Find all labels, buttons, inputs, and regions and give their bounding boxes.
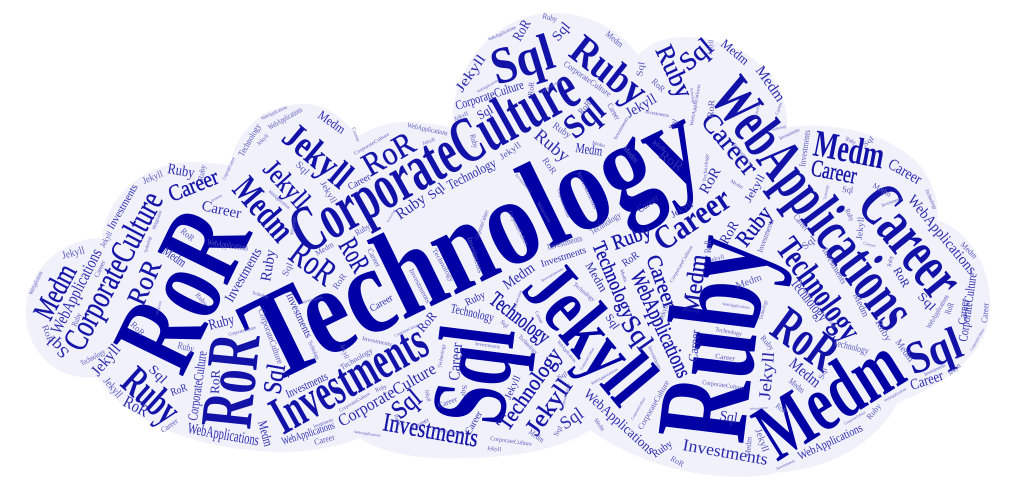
- tiny words: Sql: [861, 135, 876, 149]
- tiny words: Ruby: [844, 136, 857, 146]
- tiny words: Medm: [787, 376, 807, 395]
- tiny words: Investments: [465, 236, 485, 274]
- tiny words: WebApplications: [535, 202, 551, 224]
- tiny words: WebApplications: [476, 77, 500, 94]
- tiny words: Investments: [881, 197, 903, 209]
- small words: Medm: [255, 419, 276, 448]
- tiny words: Jekyll: [651, 140, 666, 153]
- tiny words: CorporateCulture: [256, 307, 285, 365]
- tiny words: Ruby: [541, 11, 558, 24]
- tiny words: Ruby: [468, 133, 480, 149]
- tiny words: Medm: [604, 29, 625, 49]
- tiny words: CorporateCulture: [511, 290, 523, 310]
- medium regular words: Sql: [385, 383, 427, 425]
- tiny words: WebApplications: [28, 270, 45, 296]
- tiny words: Technology: [438, 343, 447, 368]
- tiny words: Investments: [755, 218, 776, 254]
- tiny words: CorporateCulture: [393, 322, 420, 338]
- small words: WebApplications: [186, 420, 260, 449]
- tiny words: Technology: [588, 209, 623, 237]
- tiny words: CorporateCulture: [228, 326, 257, 338]
- medium bold words: Technology: [769, 230, 870, 348]
- tiny words: Jekyll: [706, 39, 715, 55]
- tiny words: WebApplications: [407, 121, 449, 138]
- tiny words: Sql: [293, 159, 311, 178]
- tiny words: WebApplications: [750, 405, 769, 411]
- small words: Sql: [43, 332, 73, 361]
- medium bold words: [112, 24, 969, 434]
- tiny words: Career: [715, 352, 736, 363]
- tiny words: Technology: [306, 340, 320, 361]
- tiny words: Medm: [618, 269, 627, 283]
- tiny words: WebApplications: [154, 300, 163, 315]
- small words: Career: [955, 298, 971, 325]
- tiny words: WebApplications: [731, 143, 753, 168]
- tiny words: Investments: [313, 418, 334, 430]
- small words: CorporateCulture: [186, 350, 211, 422]
- word: Ruby large: Ruby: [629, 228, 797, 449]
- tiny words: WebApplications: [261, 105, 288, 122]
- tiny words: Technology: [517, 334, 539, 356]
- small words: CorporateCulture: [334, 359, 439, 430]
- tiny words: Career: [93, 259, 108, 279]
- medium regular words: Sql: [673, 32, 719, 77]
- tiny words: Sql: [280, 260, 295, 278]
- tiny words: Technology: [144, 235, 153, 254]
- tiny words: Investments: [546, 233, 584, 252]
- small words: Investments: [681, 435, 769, 469]
- tiny words: Investments: [924, 364, 947, 378]
- tiny words: Sql: [634, 60, 647, 77]
- tiny words: Investments: [362, 336, 393, 348]
- small words: WebApplications: [280, 419, 336, 448]
- tiny words: Investments: [475, 342, 500, 350]
- tiny words: Ruby: [196, 164, 208, 181]
- tiny words: Medm: [893, 337, 916, 364]
- tiny words: Career: [775, 101, 784, 116]
- tiny words: CorporateCulture: [562, 58, 614, 99]
- tiny words: Technology: [79, 347, 107, 368]
- medium regular words: Medm: [678, 252, 712, 316]
- tiny words: Jekyll: [947, 363, 963, 378]
- medium regular words: Career: [641, 252, 683, 311]
- small words: Sql: [550, 20, 574, 45]
- tiny words: Jekyll: [657, 304, 670, 321]
- small words: WebApplications: [904, 192, 979, 278]
- small words: Ruby: [463, 289, 488, 309]
- tiny words: Jekyll: [256, 133, 271, 147]
- small words: Investments: [283, 291, 314, 340]
- tiny words: CorporateCulture: [474, 209, 491, 241]
- small words: Career: [446, 341, 466, 381]
- tiny words: RoR: [576, 98, 593, 116]
- tiny words: CorporateCulture: [338, 392, 372, 414]
- small words: Jekyll: [669, 199, 695, 221]
- tiny words: Career: [791, 212, 811, 233]
- tiny words: Jekyll: [318, 179, 339, 205]
- small words: Technology: [449, 300, 496, 325]
- small words: Jekyll: [742, 173, 768, 204]
- tiny words: CorporateCulture: [559, 383, 571, 410]
- tiny words: Technology: [689, 87, 697, 104]
- medium bold words: Career: [647, 180, 738, 259]
- medium regular words: RoR: [356, 125, 422, 184]
- tiny words: CorporateCulture: [354, 132, 391, 157]
- medium regular words: Ruby: [609, 218, 655, 255]
- small words: Career: [200, 198, 243, 222]
- tiny words: Technology: [771, 123, 787, 132]
- tiny words: Jekyll: [61, 244, 86, 262]
- tiny words: Career: [350, 127, 360, 143]
- tiny words: Career: [979, 302, 991, 323]
- tiny words: Technology: [821, 313, 837, 330]
- tiny words: Medm: [734, 272, 764, 292]
- word: Technology: Technology: [221, 70, 723, 410]
- small words: RoR: [207, 369, 223, 394]
- tiny words: Ruby: [843, 207, 856, 223]
- tiny words: Technology: [753, 103, 761, 118]
- tiny words: Sql: [556, 370, 569, 382]
- tiny words: Ruby: [193, 291, 210, 308]
- small words: RoR: [697, 165, 724, 197]
- tiny words: Technology: [923, 189, 937, 211]
- tiny words: Technology: [703, 153, 710, 182]
- tiny words: WebApplications: [722, 301, 751, 310]
- medium regular words: RoR: [121, 255, 167, 309]
- tiny words: CorporateCulture: [843, 409, 866, 426]
- tiny words: Technology: [759, 300, 769, 321]
- small words: Sql: [915, 289, 940, 314]
- medium regular words: RoR: [282, 232, 345, 293]
- small words: RoR: [890, 264, 913, 290]
- small words: Ruby: [650, 438, 675, 460]
- tiny words: Investments: [775, 458, 796, 471]
- small words: Sql: [556, 403, 587, 433]
- tiny words: Medm: [591, 141, 605, 149]
- small words: Technology: [445, 156, 499, 194]
- medium bold words: Ruby: [561, 27, 656, 115]
- tiny words: Medm: [314, 240, 336, 258]
- tiny words: Jekyll: [709, 254, 725, 264]
- tiny words: Technology: [338, 346, 374, 372]
- tiny words: Medm: [592, 418, 605, 433]
- tiny words: Ruby: [392, 414, 402, 427]
- tiny words: WebApplications: [925, 293, 951, 330]
- medium regular words: Jekyll: [521, 374, 578, 440]
- medium regular words: Ruby: [650, 40, 699, 102]
- tiny words: Career: [605, 102, 622, 122]
- medium regular words: Technology: [492, 343, 567, 435]
- tiny words: Jekyll: [422, 138, 437, 147]
- word: RoR second: RoR: [185, 329, 277, 432]
- small words: Jekyll: [623, 91, 660, 121]
- tiny words: Career: [411, 415, 431, 432]
- tiny words: RoR: [526, 81, 536, 96]
- word: RoR large: RoR: [88, 186, 276, 389]
- tiny words: Career: [159, 416, 180, 435]
- tiny words: Jekyll: [141, 169, 165, 187]
- small words: RoR: [510, 17, 535, 44]
- tiny words: Jekyll: [752, 427, 771, 454]
- small words: WebApplications: [580, 387, 657, 458]
- word: Sql large: Sql: [409, 319, 539, 430]
- medium regular words: Ruby: [730, 201, 777, 251]
- tiny words: WebApplications: [207, 237, 249, 253]
- small words: Ruby: [207, 312, 237, 334]
- tiny words: Jekyll: [98, 229, 115, 249]
- medium regular words: Medm: [27, 259, 83, 325]
- small words: Jekyll: [503, 374, 523, 401]
- tiny words: Investments: [646, 346, 661, 371]
- tiny words: CorporateCulture: [538, 77, 563, 95]
- tiny words: RoR: [705, 99, 717, 118]
- tiny words: Sql: [842, 184, 854, 195]
- tiny words: WebApplications: [266, 105, 304, 132]
- tiny words: CorporateCulture: [490, 436, 532, 448]
- tiny words: Investments: [514, 172, 534, 194]
- small words: Medm: [785, 355, 824, 392]
- tiny words: Sql: [552, 424, 564, 438]
- small words: Sql: [603, 312, 622, 332]
- tiny words: Jekyll: [487, 446, 502, 453]
- medium regular words: WebApplications: [625, 267, 697, 381]
- small words: Investments: [222, 246, 265, 305]
- medium regular words: RoR: [332, 233, 376, 278]
- tiny words: Technology: [832, 337, 870, 357]
- medium regular words: Sql: [257, 361, 291, 396]
- small words: Jekyll: [755, 351, 778, 400]
- tiny words: WebApplications: [152, 210, 164, 231]
- small words: RoR: [169, 382, 190, 399]
- small words: Ruby: [166, 161, 196, 182]
- tiny words: Investments: [407, 267, 432, 305]
- medium bold words: Medm: [810, 123, 888, 177]
- small words: Career: [635, 192, 662, 215]
- tiny words: Ruby: [70, 311, 84, 328]
- tiny words: Technology: [385, 208, 397, 224]
- medium regular words: Career: [695, 107, 765, 181]
- tiny words: CorporateCulture: [969, 327, 985, 352]
- small words: Sql: [474, 101, 496, 123]
- medium regular words: Technology: [485, 286, 555, 349]
- small words: Medm: [718, 36, 752, 68]
- tiny words: Sql: [800, 234, 819, 252]
- medium bold words: Sql: [898, 317, 969, 384]
- small words: Medm: [574, 141, 603, 160]
- medium regular words: Career: [809, 155, 859, 190]
- tiny words: CorporateCulture: [556, 189, 571, 219]
- tiny words: Technology: [430, 247, 456, 284]
- small words: Sql: [718, 408, 739, 427]
- tiny words: RoR: [540, 155, 559, 176]
- tiny words: Ruby: [176, 340, 195, 355]
- medium bold words: Medm: [224, 169, 302, 250]
- tiny words: Jekyll: [497, 139, 523, 162]
- small words: Career: [346, 171, 373, 193]
- tiny words: RoR: [179, 226, 197, 243]
- small words: Jekyll: [453, 52, 489, 95]
- tiny words: RoR: [129, 319, 147, 338]
- word: Jekyll large: Jekyll: [506, 245, 674, 421]
- tiny words: Investments: [613, 117, 630, 141]
- small words: Jekyll: [88, 341, 125, 380]
- medium bold words: Sql: [556, 91, 612, 146]
- tiny words: Medm: [743, 436, 754, 457]
- tiny words: WebApplications: [590, 366, 619, 386]
- tiny words: WebApplications: [267, 190, 291, 211]
- tiny words: CorporateCulture: [222, 157, 237, 181]
- tiny words: Medm: [959, 240, 980, 261]
- tiny words: Medm: [527, 427, 546, 445]
- small words: Sql: [146, 362, 171, 387]
- word: WebApplications large: WebApplications: [697, 65, 929, 342]
- tiny words: CorporateCulture: [669, 244, 695, 284]
- tiny words: Investments: [210, 192, 223, 203]
- tiny words: Career: [437, 394, 459, 410]
- word: Investments large: Investments: [260, 311, 438, 445]
- tiny words: Technology: [236, 121, 263, 158]
- tiny words: Ruby: [887, 255, 895, 267]
- small words: Medm: [752, 63, 788, 105]
- tiny words: CorporateCulture: [435, 427, 463, 436]
- tiny words: Jekyll: [101, 375, 125, 401]
- tiny words: RoR: [774, 401, 789, 416]
- small words: Sql: [424, 179, 448, 202]
- small words: Career: [908, 368, 946, 394]
- tiny words: RoR: [942, 301, 956, 316]
- tiny words: Ruby: [550, 120, 573, 141]
- small words: Career: [368, 292, 396, 315]
- small words: Career: [685, 328, 703, 362]
- tiny words: Jekyll: [423, 389, 431, 402]
- tiny words: Career: [365, 247, 383, 269]
- small words: CorporateCulture: [955, 272, 980, 342]
- small words: Medm: [500, 260, 538, 293]
- tiny words: Investments: [575, 171, 598, 211]
- tiny words: Investments: [645, 110, 669, 119]
- tiny words: RoR: [330, 271, 348, 291]
- medium regular words: CorporateCulture: [56, 186, 171, 357]
- tiny words: RoR: [669, 454, 686, 469]
- small words: Technology: [787, 275, 831, 325]
- medium bold words: Sql: [484, 24, 561, 96]
- tiny words: RoR: [40, 323, 56, 345]
- small words: Investments: [105, 182, 141, 232]
- tiny words: Medm: [620, 144, 641, 165]
- word: Career large: Career: [844, 169, 979, 312]
- word: Medm large: Medm: [738, 317, 919, 477]
- tiny words: Career: [313, 432, 336, 447]
- tiny words: Medm: [850, 292, 871, 319]
- small words: Ruby: [393, 190, 429, 223]
- small words: Medm: [582, 260, 611, 295]
- tiny words: WebApplications: [690, 84, 702, 126]
- medium bold words: Ruby: [112, 358, 189, 434]
- tiny words: Investments: [540, 266, 565, 283]
- tiny words: Ruby: [353, 221, 372, 238]
- tiny words: Technology: [572, 282, 595, 303]
- medium regular words: Technology: [587, 238, 639, 322]
- medium bold words: Jekyll: [274, 115, 361, 197]
- tiny words: Jekyll: [453, 111, 470, 123]
- small words: WebApplications: [795, 420, 865, 463]
- small words: CorporateCulture: [453, 77, 526, 113]
- tiny words: Ruby: [865, 402, 883, 421]
- small words: RoR: [414, 308, 440, 335]
- tiny words: Sql: [460, 385, 468, 396]
- medium regular words: Career: [165, 164, 222, 207]
- tiny words: WebApplications: [488, 26, 517, 43]
- tiny words: CorporateCulture: [636, 378, 671, 431]
- small words: RoR: [620, 249, 642, 269]
- medium regular words: Jekyll: [258, 154, 317, 215]
- small words: RoR: [120, 392, 152, 421]
- small words: WebApplications: [47, 245, 106, 337]
- small words: Investments: [540, 245, 588, 270]
- tiny words: Ruby: [872, 318, 893, 343]
- small words: Medm: [315, 107, 348, 137]
- medium bold words: RoR: [761, 297, 850, 383]
- tiny words: WebApplications: [555, 340, 577, 364]
- small words: RoR: [717, 218, 743, 247]
- tiny words: WebApplications: [354, 429, 382, 438]
- tiny words: Technology: [822, 185, 830, 200]
- small words: Ruby: [530, 125, 574, 166]
- tiny words: CorporateCulture: [702, 380, 744, 392]
- tiny words: Career: [863, 240, 877, 249]
- medium regular words: [27, 32, 859, 453]
- tiny words: WebApplications: [883, 386, 907, 403]
- tiny words: Investments: [797, 129, 812, 167]
- tiny words: CorporateCulture: [579, 346, 595, 370]
- small words: Ruby: [258, 248, 280, 283]
- tiny words: RoR: [650, 76, 667, 94]
- small words: Investments: [283, 369, 330, 401]
- tiny words: Jekyll: [338, 343, 351, 360]
- tiny words: Ruby: [375, 384, 388, 394]
- tiny words: Investments: [820, 246, 849, 286]
- tiny words: WebApplications: [290, 217, 298, 235]
- medium regular words: Investments: [381, 407, 481, 453]
- tiny words: Medm: [871, 181, 893, 199]
- medium regular words: Sql: [615, 310, 659, 356]
- tiny words: Medm: [729, 179, 744, 191]
- tiny words: Investments: [301, 295, 324, 306]
- small words: Medm: [160, 243, 189, 270]
- tiny words: RoR: [703, 240, 713, 253]
- tiny words: CorporateCulture: [506, 210, 529, 247]
- tiny words: Career: [533, 311, 543, 325]
- tiny words: CorporateCulture: [630, 396, 646, 420]
- tiny words: Sql: [499, 319, 509, 330]
- tiny words: Sql: [667, 117, 679, 131]
- tiny words: Jekyll: [854, 216, 866, 240]
- tiny words: Ruby: [758, 334, 776, 352]
- small words: Career: [463, 409, 485, 436]
- small words: Career: [885, 156, 925, 189]
- tiny words: Sql: [816, 366, 829, 381]
- tiny words: Technology: [715, 327, 742, 338]
- tiny words: Investments: [779, 128, 801, 142]
- tiny words: Technology: [251, 291, 270, 300]
- small words: RoR: [656, 148, 686, 176]
